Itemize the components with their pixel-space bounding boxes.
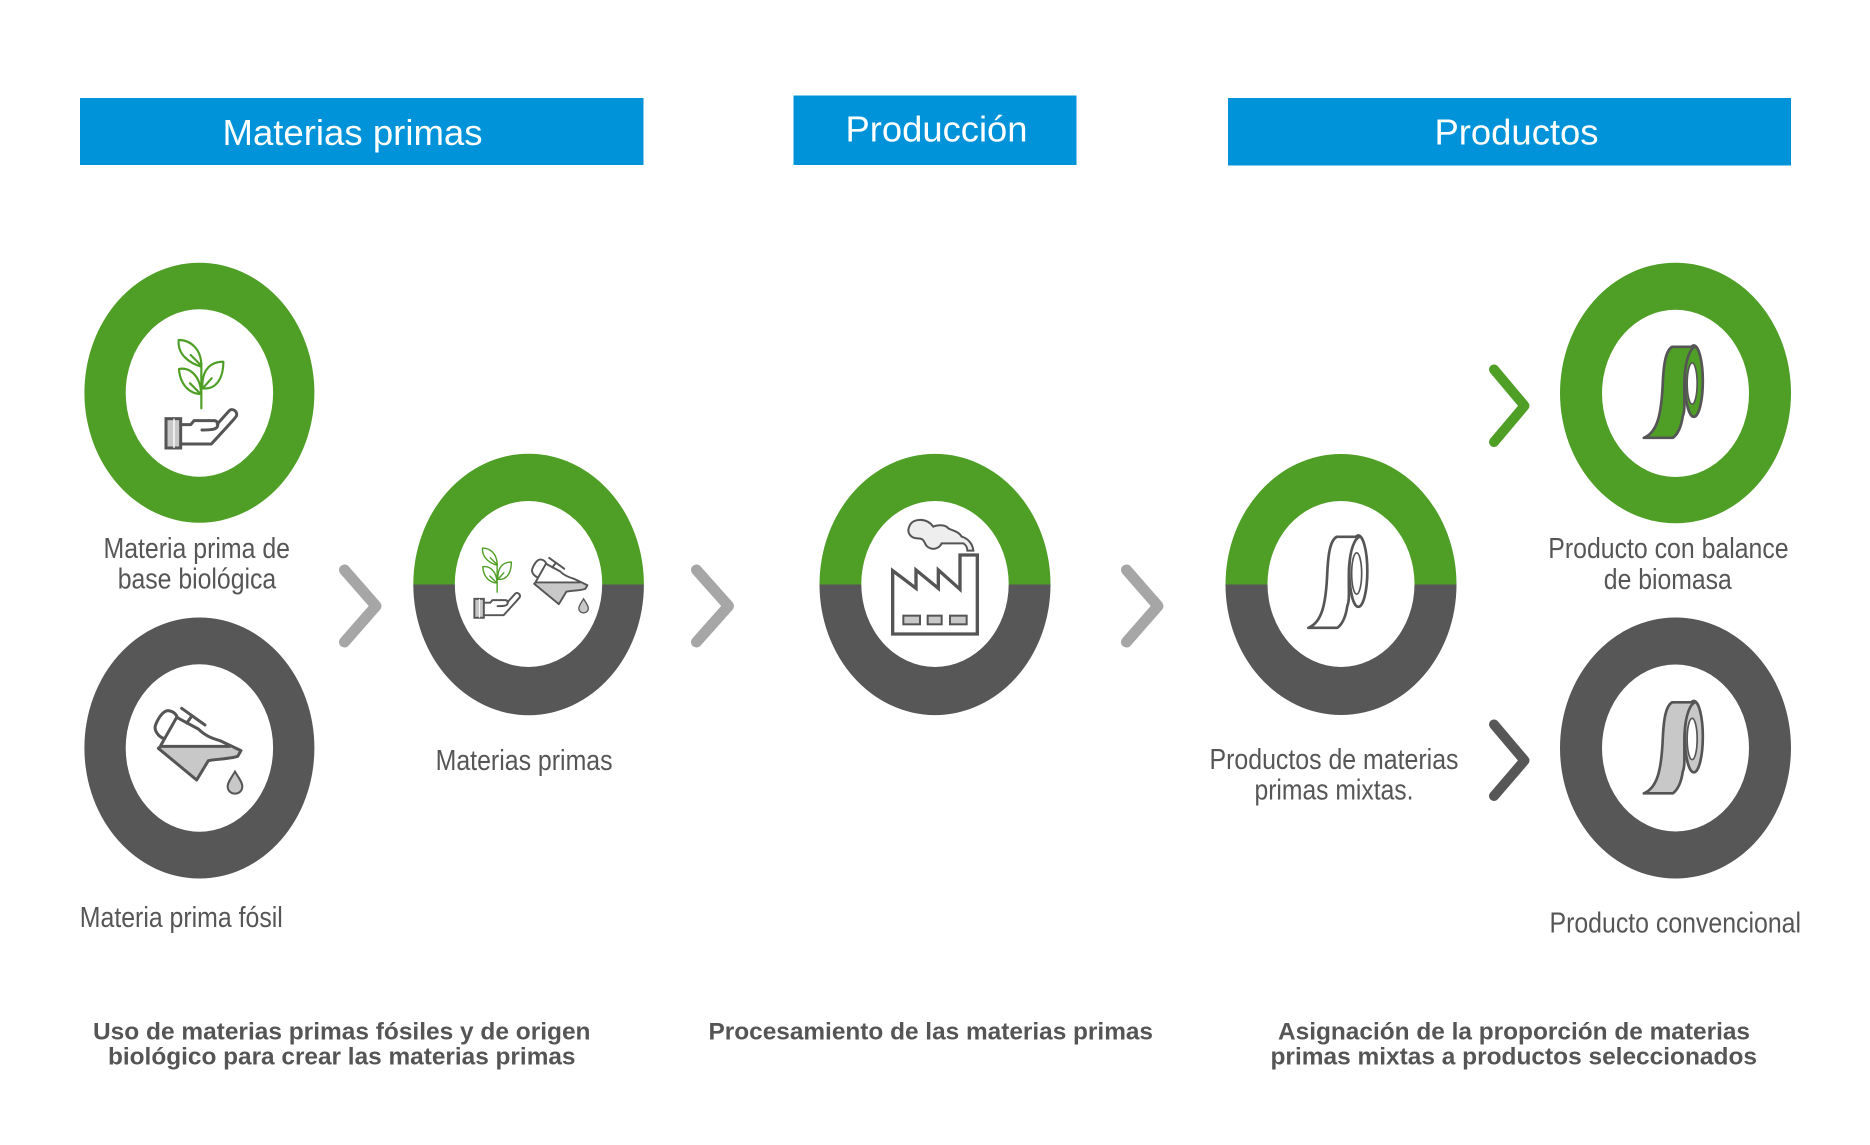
- caption: raw materials: [93, 1018, 590, 1070]
- label: Productos de materias primas mixtas: primas mixtas.: [1254, 774, 1414, 806]
- caption: production: Procesamiento de las materias primas: [708, 1018, 1153, 1046]
- label: Materia prima fósil: Materia prima fósil: [80, 902, 283, 934]
- ring: biomass balance product with green tape: [1560, 263, 1791, 523]
- label: Productos de materias primas mixtas: Productos de materias: [1210, 744, 1458, 776]
- header: Producción: Producción: [846, 108, 1028, 150]
- label: Materias primas: Materias primas: [436, 745, 613, 777]
- icon: small plant in hand: [474, 548, 520, 618]
- label: Materia prima de base biológica: [104, 533, 290, 596]
- icon: oil jug: [155, 708, 242, 794]
- ring: mixed raw materials: [413, 454, 644, 715]
- ring: production with factory icon: [820, 454, 1050, 715]
- arrow: grey chevron to products: [1126, 570, 1158, 642]
- label: Producto con balance de biomasa: de biomasa: [1604, 564, 1733, 596]
- icon: green tape roll: [1644, 345, 1703, 438]
- arrow: green chevron: [1494, 370, 1524, 442]
- ring: fossil raw material with jug icon: [84, 618, 314, 878]
- arrow: grey chevron to mixed raw materials: [344, 570, 376, 642]
- caption: raw materials: Uso de materias primas fósiles y de origen: [93, 1018, 590, 1046]
- label: Productos de materias primas mixtas: [1210, 744, 1458, 806]
- icon: white tape roll: [1308, 535, 1367, 628]
- arrow: grey chevron to production: [696, 570, 728, 642]
- ring: conventional product with grey tape: [1560, 618, 1791, 878]
- arrow: dark chevron: [1494, 724, 1524, 796]
- label: Producto con balance de biomasa: [1548, 533, 1789, 596]
- label: Producto con balance de biomasa: Producto con balance: [1548, 533, 1789, 565]
- caption: raw materials: biológico para crear las materias primas: [108, 1044, 576, 1070]
- header: Materias primas: [80, 98, 644, 165]
- icon: small oil jug: [532, 558, 588, 613]
- header: Producción: [794, 96, 1076, 165]
- label: Producto convencional: Producto convencional: [1550, 908, 1801, 940]
- header: Productos: [1228, 98, 1791, 166]
- label: Materia prima de base biológica: Materia prima de: [104, 533, 290, 565]
- ring: mixed raw material products with white tape: [1226, 454, 1456, 715]
- caption: products: primas mixtas a productos seleccionados: [1270, 1044, 1757, 1070]
- header: Materias primas: Materias primas: [222, 112, 482, 153]
- icon: grey tape roll: [1644, 701, 1703, 793]
- header: Productos: Productos: [1434, 112, 1598, 152]
- label: Materia prima de base biológica: base biológica: [118, 564, 277, 596]
- icon: factory: [893, 520, 977, 634]
- ring: bio-based raw material with plant icon: [84, 263, 314, 523]
- icon: plant in hand: [166, 340, 237, 448]
- caption: products: [1270, 1018, 1757, 1070]
- caption: products: Asignación de la proporción de materias: [1278, 1018, 1750, 1046]
